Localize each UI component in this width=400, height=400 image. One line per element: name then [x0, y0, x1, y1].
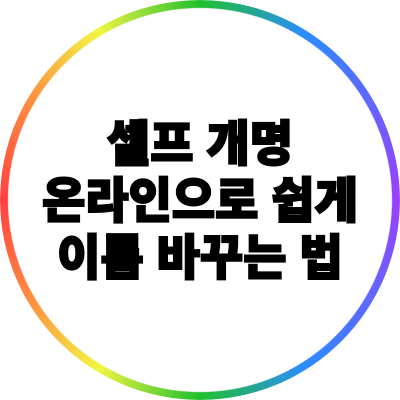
title [42, 116, 358, 285]
title line 1: 셀프 개명 [107, 116, 293, 171]
title line 3: 이름 바꾸는 법 [57, 230, 343, 285]
title line 2: 온라인으로 쉽게 [42, 173, 358, 228]
